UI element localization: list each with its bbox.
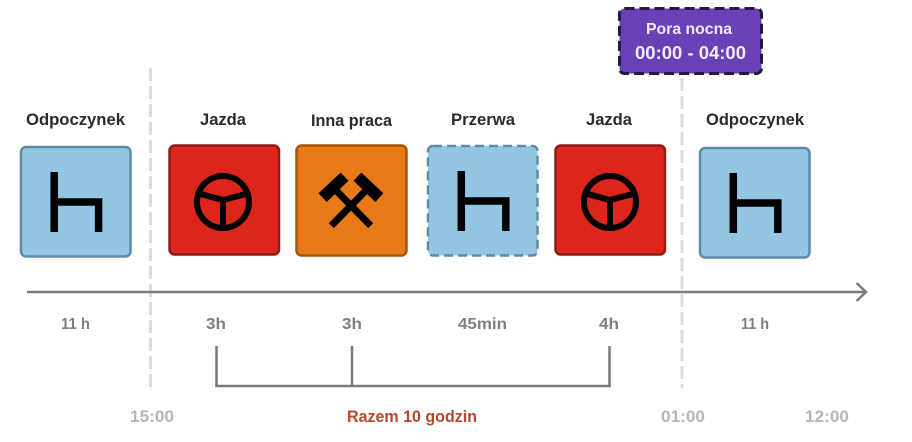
duration label: 4h: 4h [599,316,619,333]
heading: Odpoczynek: Odpoczynek [706,111,805,129]
panel: rest [700,148,810,258]
heading: Jazda: Jazda [200,111,247,129]
time label: 01:00: 01:00 [661,407,705,426]
callout: night period: Pora nocna [646,21,732,38]
panel: driving [170,146,279,254]
icon: bed [54,172,99,232]
callout: night period [620,8,762,74]
total label: Razem 10 godzin [347,408,477,426]
duration label: 3h: 3h [206,316,226,333]
duration label: 45min: 45min [458,316,507,333]
icon: steering wheel [197,176,249,228]
heading: Przerwa: Przerwa [451,111,516,129]
icon: crossed hammers [319,173,383,226]
arrow: time axis [27,283,866,301]
time label: 15:00: 15:00 [130,407,174,426]
panel: break [428,146,538,256]
icon: steering wheel [584,176,636,228]
panel: other work [296,146,406,256]
heading: Inna praca: Inna praca [311,112,393,130]
duration label: 3h: 3h [342,316,362,333]
icon: bed [733,173,778,233]
heading: Odpoczynek: Odpoczynek [26,111,126,129]
time label: 12:00: 12:00 [805,407,849,426]
callout: night period: 00:00 - 04:00 [635,43,746,63]
panel: rest [21,147,130,256]
icon: bed [461,171,506,231]
duration label: 11 h: 11 h [61,316,90,333]
bracket: 10 hours total [216,346,610,386]
duration label: 11 h: 11 h [741,316,769,333]
panel: driving [556,146,665,254]
heading: Jazda: Jazda [586,111,633,129]
